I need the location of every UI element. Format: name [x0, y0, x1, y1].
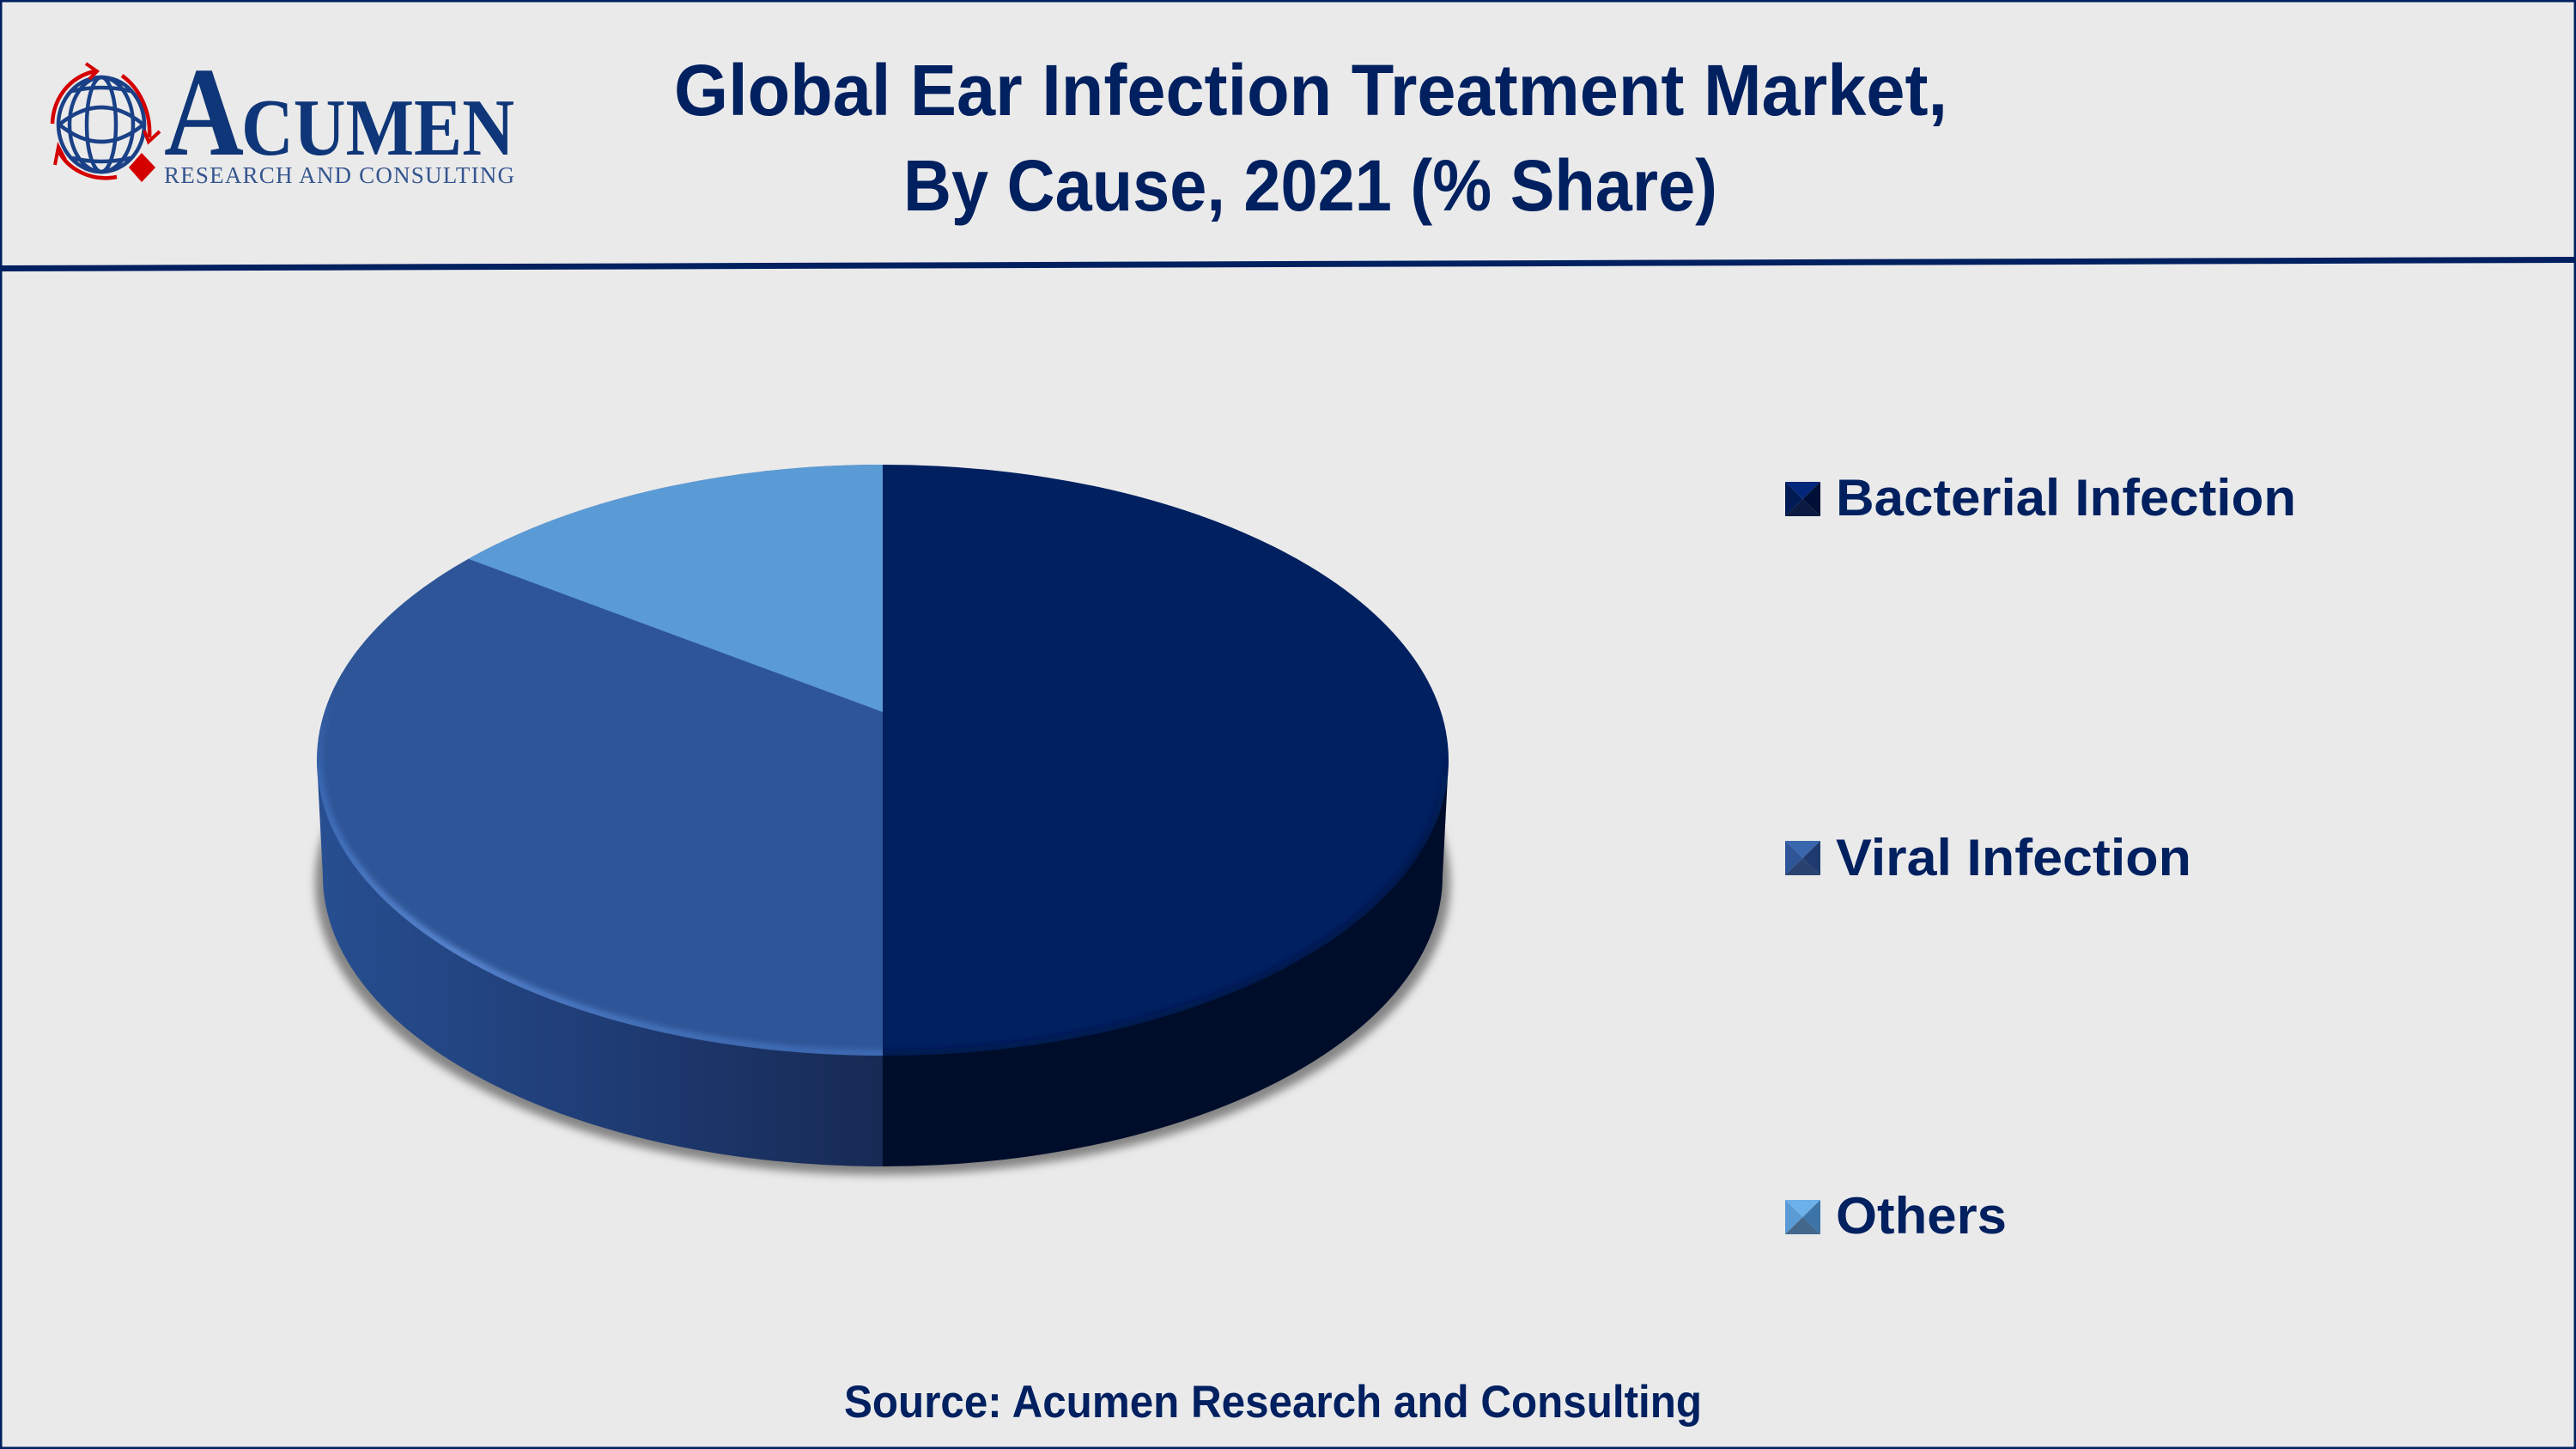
legend	[1785, 469, 2296, 1245]
pie side: viral infection	[317, 760, 883, 1166]
3D pie chart	[258, 429, 1458, 1175]
pie shadow	[315, 591, 1450, 1175]
icon: globe with red arrows	[52, 64, 160, 182]
legend item: bacterial infection: Bacterial Infection	[1836, 469, 2296, 527]
logo tagline: RESEARCH AND CONSULTING	[164, 162, 514, 188]
title: Global Ear Infection Treatment Market,	[674, 50, 1947, 131]
title: By Cause, 2021 (% Share)	[903, 145, 1717, 226]
pie slice: viral infection	[317, 465, 883, 1056]
logo: Acumen Research and Consulting: CUMEN	[241, 83, 514, 173]
logo wordmark: A	[164, 42, 244, 183]
legend icon: viral	[1785, 841, 1820, 875]
legend icon: bacterial	[1785, 482, 1820, 516]
title	[674, 50, 1947, 226]
pie slice: bacterial infection	[883, 465, 1449, 1056]
pie side: bacterial infection	[883, 760, 1449, 1166]
legend icon: others	[1785, 1200, 1820, 1234]
legend item: others: Others	[1836, 1187, 2007, 1245]
header divider line	[2, 257, 2576, 271]
logo: Acumen Research and Consulting	[52, 42, 514, 188]
legend item: viral infection: Viral Infection	[1836, 829, 2191, 886]
source note: Source: Acumen Research and Consulting	[844, 1377, 1702, 1428]
pie slice: others	[469, 465, 883, 712]
